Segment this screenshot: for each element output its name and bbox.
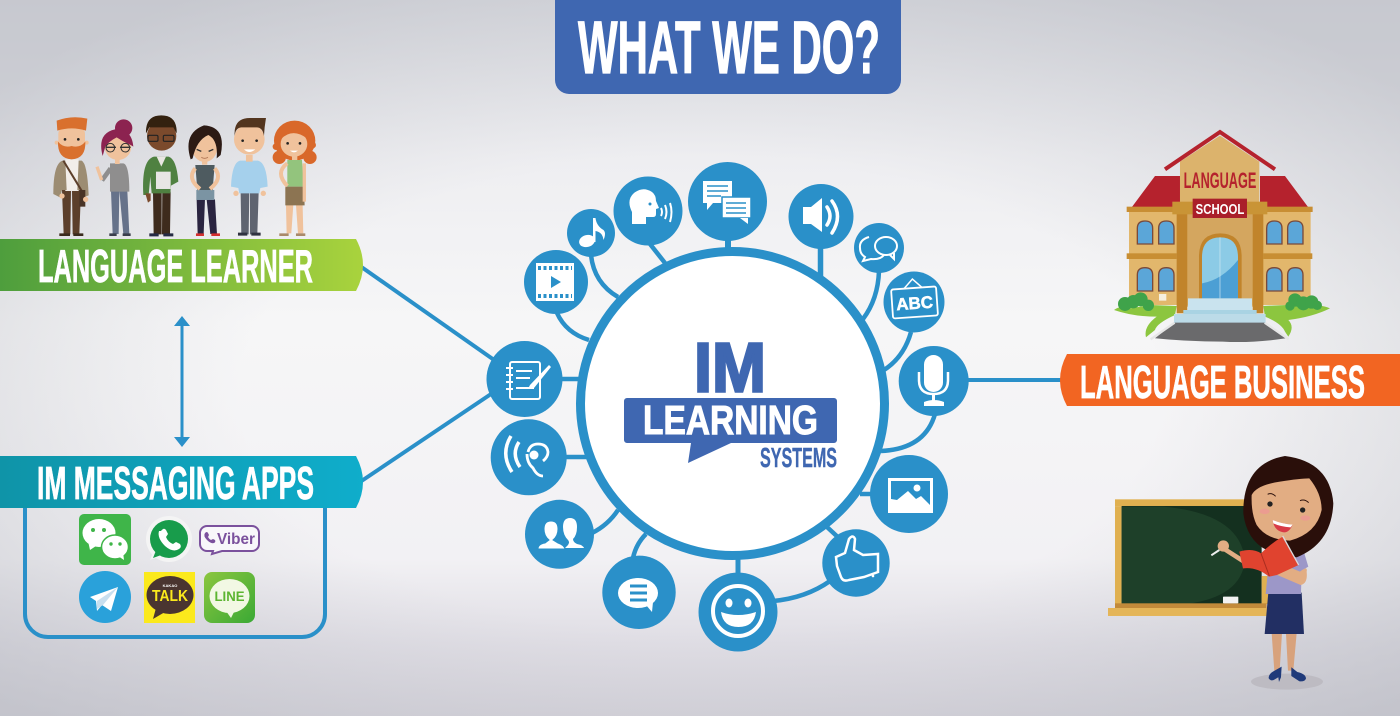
title <box>555 0 901 94</box>
icon: WeChat <box>79 514 131 565</box>
icon: Viber <box>200 526 259 554</box>
banner: language learner: LANGUAGE LEARNER <box>38 240 313 292</box>
person: man in blue shirt <box>231 118 268 236</box>
app icons <box>79 514 259 623</box>
logo: IM Learning Systems: LEARNING <box>643 397 818 443</box>
person: man in green sweater <box>143 115 178 236</box>
person: woman in grey top <box>188 125 222 236</box>
banner: IM messaging apps <box>0 456 363 509</box>
illustration: language school <box>1114 132 1330 342</box>
icon: microphone <box>899 346 969 416</box>
icon: ABC sign <box>884 272 944 332</box>
icon: KakaoTalk: TALK <box>152 588 188 605</box>
arrow: language learner to hub <box>360 266 497 362</box>
icon: film <box>524 250 588 314</box>
arrow: language business to hub <box>966 378 1064 382</box>
illustration: language school: SCHOOL <box>1196 202 1244 218</box>
logo: IM Learning Systems: IM <box>694 328 766 406</box>
logo: IM Learning Systems: SYSTEMS <box>760 442 837 473</box>
hub connectors <box>557 238 935 601</box>
logo: IM Learning Systems <box>624 328 837 473</box>
icon: Viber: Viber <box>217 531 255 548</box>
people group <box>53 115 317 236</box>
icon: music note <box>567 209 615 257</box>
banner: IM messaging apps: IM MESSAGING APPS <box>37 457 314 509</box>
sign text: LANGUAGE <box>1184 168 1256 193</box>
icon: chat messages <box>688 162 767 241</box>
icon: two users <box>525 500 594 569</box>
icon: speech bubble with lines <box>602 556 676 629</box>
icon: speaking head <box>614 176 682 246</box>
title: WHAT WE DO? <box>578 6 880 89</box>
icon: picture <box>870 455 948 533</box>
icon: ear <box>491 419 567 495</box>
panel: messaging apps outline <box>25 506 325 637</box>
windows <box>1137 221 1303 291</box>
icon: notes and pencil <box>486 341 562 417</box>
person: bearded man <box>53 117 89 236</box>
icon: KakaoTalk: KAKAO <box>163 583 177 588</box>
person: magenta hair <box>97 119 133 236</box>
icon: LINE <box>204 572 255 623</box>
illustration: teacher at chalkboard <box>1108 456 1333 690</box>
hub ring <box>580 252 884 556</box>
arrow: messaging apps to hub <box>360 390 497 482</box>
icon: thumbs up <box>822 529 890 597</box>
person: red-haired woman <box>273 121 317 236</box>
arrow: double-headed learner and apps <box>174 316 190 447</box>
icon: Telegram <box>79 571 131 623</box>
icon: LINE: LINE <box>214 588 244 604</box>
icon: KakaoTalk <box>144 572 195 623</box>
icon: ABC sign: ABC <box>896 293 934 314</box>
banner: language learner <box>0 239 363 292</box>
chalkboard <box>1108 499 1268 616</box>
icon: WhatsApp <box>146 516 192 562</box>
icon: speaker <box>788 184 854 249</box>
icon: speech bubbles <box>854 223 904 273</box>
icon: smiley <box>698 572 778 652</box>
